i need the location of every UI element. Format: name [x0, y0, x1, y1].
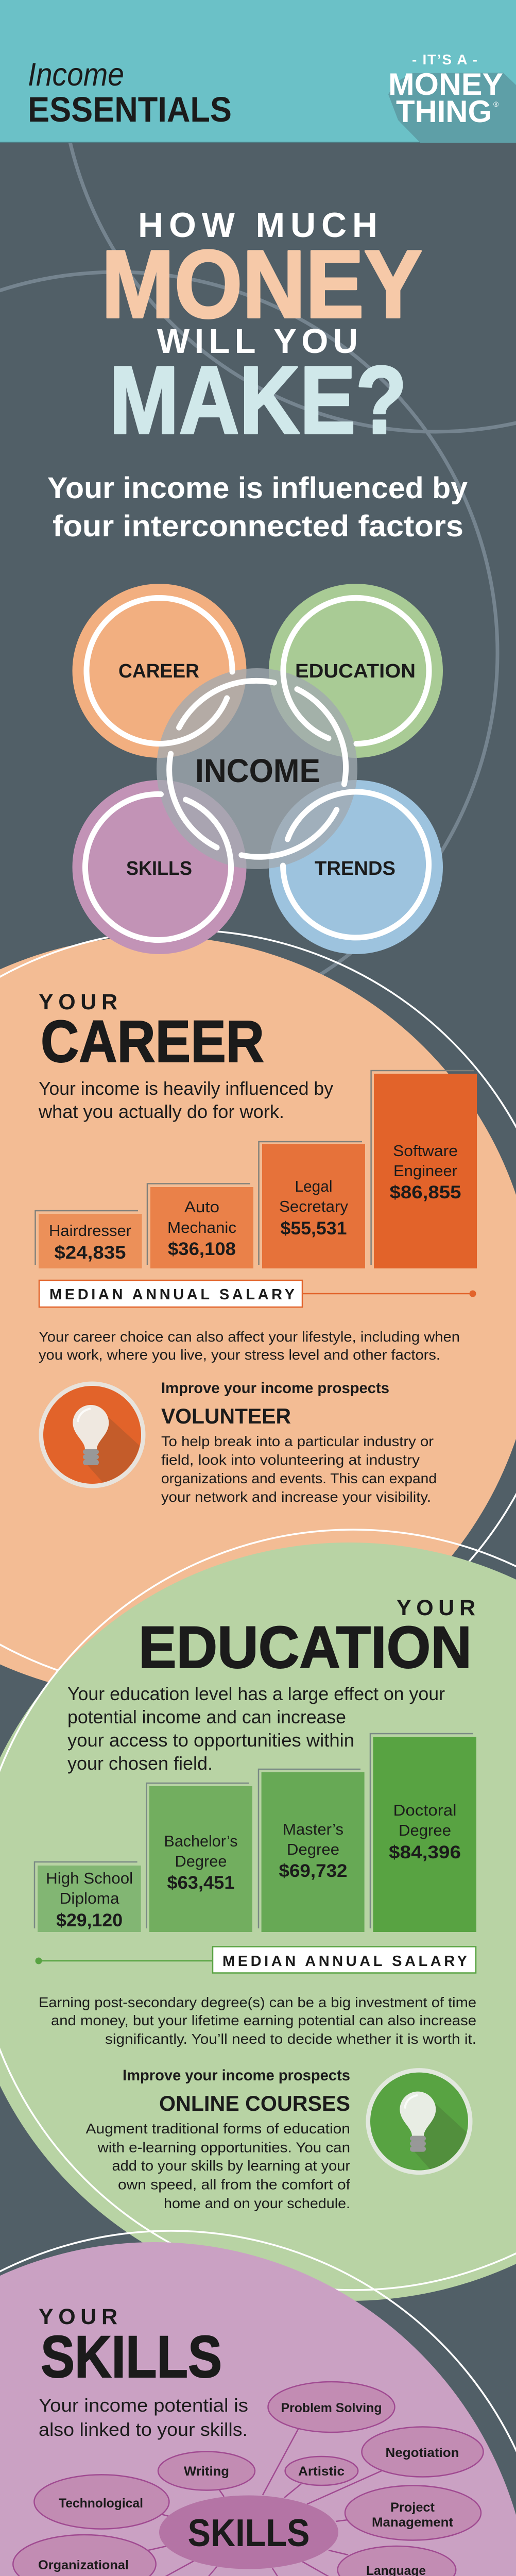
diagram: four factors around income: [72, 584, 443, 954]
main title: [101, 206, 422, 454]
bar: bachelor's degree: Bachelor’s: [164, 1832, 238, 1850]
bubble map: skills: Technological: [59, 2496, 143, 2511]
bar: software engineer: [374, 1074, 477, 1268]
circle: education: EDUCATION: [295, 660, 416, 682]
bar: high school diploma: Diploma: [60, 1889, 119, 1907]
bar: hairdresser: [39, 1214, 142, 1268]
circle: skills: [72, 780, 246, 954]
hub: skills: [159, 2496, 338, 2569]
career body text: Your career choice can also affect your lifestyle, including when: [39, 1329, 460, 1345]
bar chart: career salaries: [35, 1071, 477, 1268]
heading: your education: EDUCATION: [139, 1615, 472, 1681]
bar: software engineer: Software: [393, 1142, 458, 1160]
logo: It's a Money Thing: [388, 52, 516, 143]
tip: online courses: [85, 2067, 350, 2211]
circle: career: CAREER: [118, 660, 199, 682]
header title: Income Essentials: Income: [28, 57, 124, 93]
bar: high school diploma: [38, 1866, 141, 1932]
logo: It's a Money Thing: - IT’S A -: [412, 52, 477, 67]
circle: income: [157, 668, 357, 869]
education body text: Earning post-secondary degree(s) can be a big investment of time: [39, 1994, 476, 2010]
main title: HOW MUCH: [138, 206, 377, 245]
education body text: and money, but your lifetime earning potential can also increase: [51, 2012, 476, 2028]
header title: Income Essentials: [28, 57, 232, 129]
heading: your career: YOUR: [39, 990, 117, 1014]
circle: trends: TRENDS: [315, 858, 395, 879]
label: median annual salary: [35, 1946, 476, 1973]
bar: master's degree: Master’s: [283, 1820, 343, 1838]
circle: income: INCOME: [195, 752, 320, 789]
tip: online courses: with e-learning opportunities. You can: [97, 2139, 350, 2156]
bar: hairdresser: $24,835: [55, 1243, 126, 1263]
panel: your career: [0, 930, 516, 1698]
bar: doctoral degree: [373, 1737, 476, 1932]
bar: software engineer: Engineer: [393, 1162, 457, 1180]
panel: your education: [0, 1530, 516, 2301]
tip: online courses: add to your skills by learning at your: [112, 2158, 350, 2174]
education intro text: your access to opportunities within: [67, 1730, 354, 1751]
hub: skills: SKILLS: [187, 2511, 310, 2554]
heading: your skills: [39, 2304, 222, 2390]
subtitle: [47, 471, 468, 543]
logo: It's a Money Thing: MONEY: [388, 67, 503, 101]
header band: [0, 0, 516, 143]
education body text: [39, 1994, 476, 2047]
bar: master's degree: Degree: [287, 1840, 339, 1858]
bubble map: skills: Negotiation: [385, 2446, 459, 2460]
circle: skills: SKILLS: [126, 858, 192, 879]
subtitle: Your income is influenced by: [47, 471, 468, 505]
icon: orange light bulb: [39, 1382, 145, 1488]
heading: your skills: SKILLS: [41, 2324, 222, 2390]
education intro text: potential income and can increase: [67, 1706, 346, 1727]
heading: your education: YOUR: [397, 1596, 475, 1620]
skills intro text: Your income potential is: [39, 2395, 248, 2416]
main title: WILL YOU: [157, 322, 358, 361]
bubble map: skills: Management: [372, 2515, 454, 2530]
tip: online courses: Augment traditional forms of education: [85, 2121, 350, 2137]
career intro text: [38, 1078, 333, 1122]
bar: auto mechanic: Auto: [184, 1198, 219, 1216]
bar: auto mechanic: Mechanic: [167, 1218, 236, 1236]
bar: software engineer: $86,855: [389, 1182, 461, 1202]
skills intro text: also linked to your skills.: [39, 2419, 248, 2440]
subtitle: four interconnected factors: [53, 510, 463, 543]
bar: auto mechanic: $36,108: [168, 1239, 236, 1259]
tip: online courses: Improve your income prospects: [123, 2067, 350, 2084]
bar chart: education salaries: [35, 1734, 476, 1932]
logo: It's a Money Thing: ®: [493, 100, 499, 108]
bar: doctoral degree: $84,396: [389, 1842, 461, 1862]
bar: high school diploma: High School: [46, 1869, 133, 1887]
education intro text: your chosen field.: [67, 1753, 213, 1774]
bubble map: skills: Problem Solving: [281, 2401, 382, 2415]
bubble map: skills: Project: [390, 2500, 435, 2515]
tip: volunteer: Improve your income prospects: [161, 1380, 389, 1397]
bubble map: skills: [13, 2382, 484, 2576]
tip: volunteer: VOLUNTEER: [161, 1404, 291, 1428]
skills intro text: [39, 2395, 248, 2440]
bar: legal secretary: [262, 1144, 365, 1268]
career intro text: Your income is heavily influenced by: [39, 1078, 333, 1099]
education intro text: [67, 1683, 445, 1774]
heading: your skills: YOUR: [39, 2304, 117, 2329]
bar: legal secretary: Secretary: [279, 1197, 348, 1215]
bar: master's degree: [262, 1772, 365, 1932]
tip: online courses: ONLINE COURSES: [159, 2091, 350, 2115]
icon: green light bulb: [366, 2068, 473, 2175]
bar: high school diploma: $29,120: [56, 1910, 123, 1930]
career body text: [39, 1329, 460, 1363]
logo: It's a Money Thing: THING: [396, 94, 492, 129]
tip: volunteer: organizations and events. This can expand: [161, 1470, 437, 1486]
circle: trends: [269, 780, 443, 954]
bar: bachelor's degree: $63,451: [167, 1873, 235, 1893]
bar: doctoral degree: Doctoral: [393, 1801, 456, 1819]
bar: master's degree: $69,732: [279, 1861, 347, 1881]
career intro text: what you actually do for work.: [38, 1101, 284, 1122]
bubble map: skills: Artistic: [298, 2464, 345, 2479]
panel: your skills: [0, 2231, 516, 2576]
label: median annual salary: MEDIAN ANNUAL SALARY: [49, 1286, 295, 1303]
bubble map: skills: Organizational: [38, 2558, 129, 2572]
label: median annual salary: MEDIAN ANNUAL SALARY: [222, 1953, 467, 1970]
tip: volunteer: [161, 1380, 437, 1505]
main title: MAKE?: [109, 346, 407, 454]
bar: doctoral degree: Degree: [399, 1821, 451, 1839]
bubble map: skills: Writing: [184, 2464, 229, 2479]
bar: legal secretary: Legal: [295, 1177, 333, 1195]
education intro text: Your education level has a large effect on your: [67, 1683, 445, 1704]
bar: auto mechanic: [150, 1187, 253, 1268]
heading: your career: CAREER: [41, 1009, 264, 1075]
tip: online courses: own speed, all from the comfort of: [118, 2176, 350, 2193]
circle: education: [269, 584, 443, 758]
bar: legal secretary: $55,531: [280, 1218, 347, 1239]
label: median annual salary: [39, 1280, 476, 1307]
bar: hairdresser: Hairdresser: [49, 1222, 131, 1240]
tip: volunteer: field, look into volunteering at industry: [161, 1452, 420, 1468]
bar: bachelor's degree: [149, 1786, 252, 1932]
main title: MONEY: [101, 230, 422, 338]
header title: Income Essentials: ESSENTIALS: [28, 90, 232, 129]
tip: volunteer: your network and increase your visibility.: [161, 1489, 431, 1505]
career body text: you work, where you live, your stress level and other factors.: [39, 1347, 440, 1363]
education body text: significantly. You’ll need to decide whether it is worth it.: [105, 2031, 476, 2047]
circle: career: [72, 584, 246, 758]
tip: volunteer: To help break into a particular industry or: [161, 1433, 434, 1449]
bar: bachelor's degree: Degree: [175, 1852, 227, 1870]
tip: online courses: home and on your schedule.: [164, 2195, 350, 2211]
